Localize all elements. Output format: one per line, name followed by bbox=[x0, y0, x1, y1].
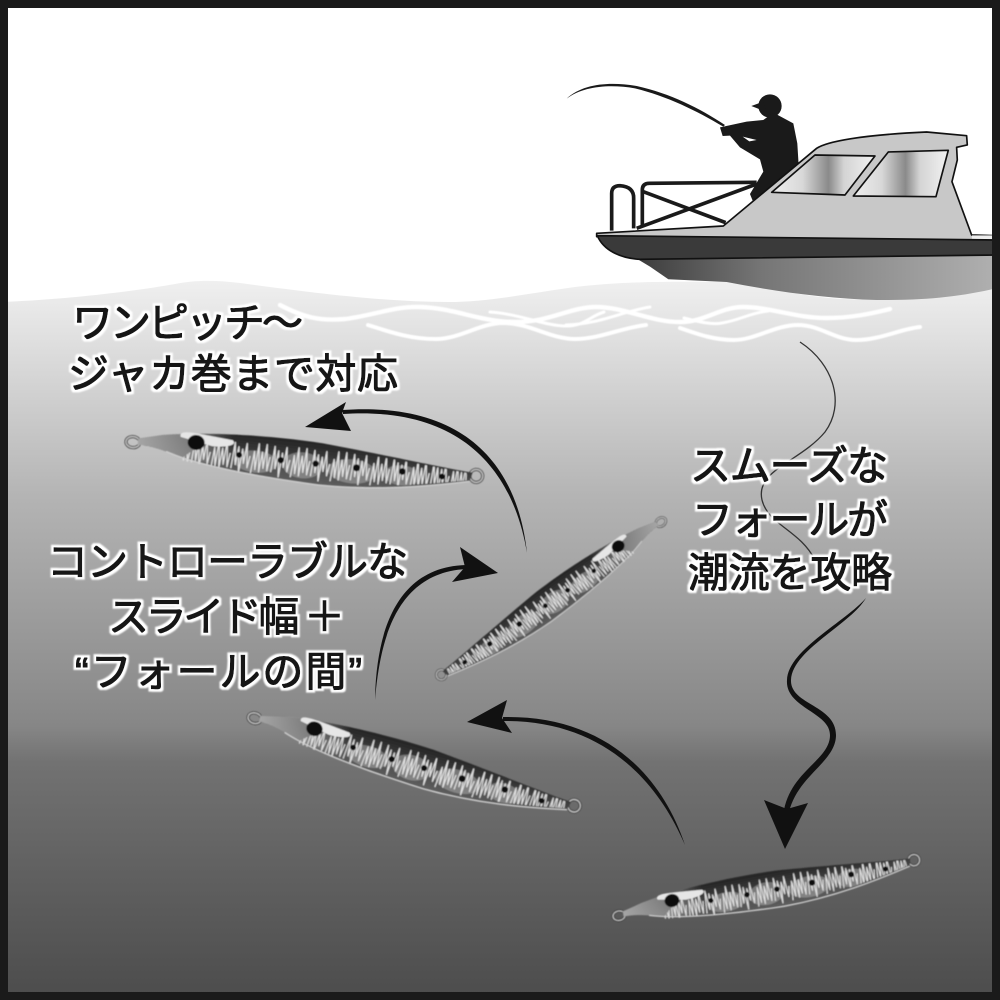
arrow: lower jerk bbox=[467, 700, 685, 845]
boat lower hull bbox=[637, 254, 997, 300]
icon: angler silhouette with rod bbox=[567, 84, 799, 201]
text: one pitch to jaka-maki bbox=[68, 300, 398, 397]
text: controllable slide width: コントローラブルな bbox=[47, 539, 408, 585]
boat hull band bbox=[597, 236, 997, 259]
arrow: fall squiggle bbox=[764, 598, 866, 849]
text: smooth fall: フォールが bbox=[692, 497, 888, 543]
thin fishing line bbox=[761, 342, 835, 560]
boat cabin bbox=[597, 132, 997, 242]
text: one pitch to jaka-maki: ジャカ巻まで対応 bbox=[68, 351, 398, 397]
lure 1 bbox=[124, 422, 485, 501]
white wave highlights bbox=[280, 305, 920, 340]
lure 3 bbox=[242, 699, 585, 831]
text: controllable slide width: “フォールの間” bbox=[75, 649, 362, 695]
text: controllable slide width: スライド幅 ＋ bbox=[108, 594, 345, 640]
water body bbox=[0, 281, 1000, 1000]
lure 2 bbox=[429, 507, 676, 694]
text: one pitch to jaka-maki: ワンピッチ〜 bbox=[72, 300, 303, 346]
arrow: upper jerk bbox=[305, 402, 527, 553]
lure 4 bbox=[610, 844, 924, 937]
text: smooth fall: 潮流を攻略 bbox=[688, 550, 892, 596]
boat deck strip bbox=[972, 235, 997, 241]
boat windows bbox=[772, 150, 948, 197]
text: controllable slide width bbox=[47, 539, 408, 695]
boat railing bbox=[612, 182, 757, 231]
text: smooth fall: スムーズな bbox=[690, 443, 888, 489]
arrow: slide to middle lure bbox=[375, 547, 498, 700]
boat and angler bbox=[567, 84, 997, 300]
text: smooth fall bbox=[688, 443, 892, 596]
